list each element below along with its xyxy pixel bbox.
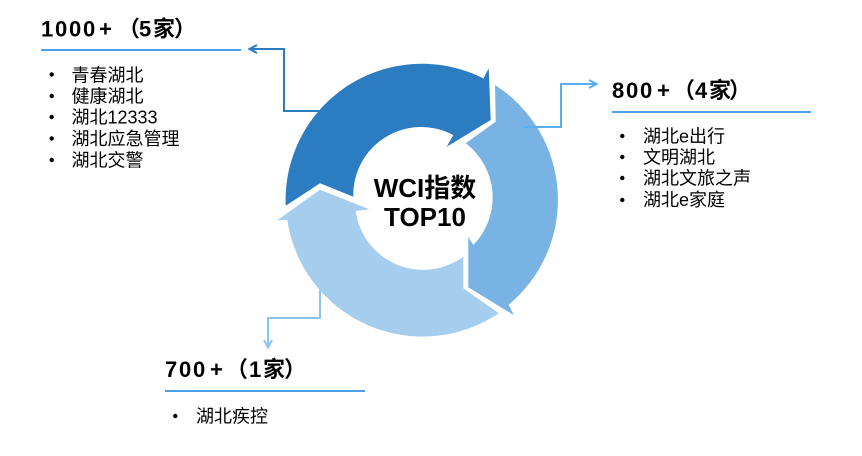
- connector arrow: 1000+ tier: [250, 45, 320, 111]
- connector arrow: 700+ tier: [264, 290, 320, 348]
- heading: 700+: 700+（1家）: [165, 357, 306, 382]
- center title: [374, 173, 476, 232]
- list: 800+ members: 湖北e家庭: [643, 190, 725, 210]
- list: 1000+ members: 湖北12333: [72, 108, 158, 128]
- cycle ring diagram: [277, 64, 558, 337]
- heading underline: [165, 390, 365, 392]
- list: 1000+ members: [50, 66, 180, 170]
- connector arrow: 800+ tier: [524, 80, 596, 127]
- list: 1000+ members: 湖北应急管理: [72, 129, 180, 149]
- list: 700+ members: 湖北疾控: [196, 406, 268, 426]
- list: 800+ members: 文明湖北: [643, 148, 715, 168]
- ring segment: medium blue arrow: [466, 85, 558, 315]
- heading underline: [41, 49, 241, 51]
- center title: WCI指数: [374, 173, 476, 203]
- list: 800+ members: 湖北文旅之声: [643, 168, 751, 188]
- panel: 800+ tier: [612, 78, 811, 210]
- heading: 800+: 800+（4家）: [612, 78, 751, 103]
- list: 1000+ members: 健康湖北: [72, 86, 144, 106]
- center title: TOP10: [384, 202, 466, 232]
- ring segment: dark blue arrow: [286, 64, 491, 206]
- panel: 1000+ tier: [41, 16, 241, 170]
- ring segment: light blue arrow: [277, 190, 499, 337]
- list: 800+ members: [620, 126, 751, 210]
- list: 1000+ members: 青春湖北: [72, 66, 144, 86]
- list: 1000+ members: 湖北交警: [72, 150, 144, 170]
- panel: 700+ tier: [165, 357, 365, 426]
- heading underline: [612, 111, 811, 113]
- list: 800+ members: 湖北e出行: [643, 126, 725, 146]
- heading: 1000+: 1000+（5家）: [41, 16, 196, 42]
